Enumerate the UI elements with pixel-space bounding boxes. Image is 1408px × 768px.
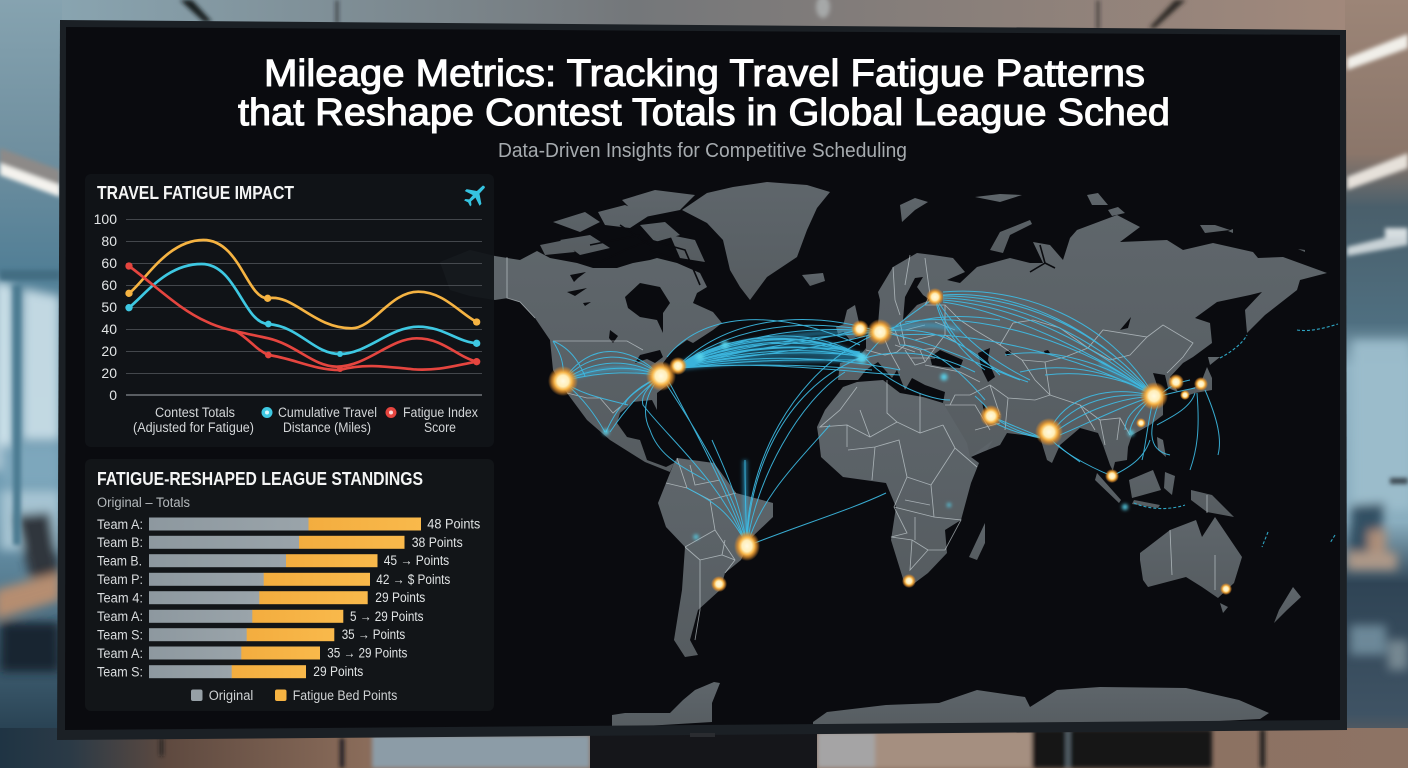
bar value labels: 35 → Points <box>342 627 405 642</box>
bar value labels: 35 → 29 Points <box>327 646 408 660</box>
panel background <box>85 459 494 711</box>
routes: transatlantic <box>667 320 900 375</box>
y-axis labels: 100 <box>94 211 117 227</box>
line chart series <box>125 240 480 372</box>
bar value labels: 5 → 29 Points <box>350 609 424 624</box>
monitor stand <box>590 728 817 768</box>
bar legend: Fatigue Bed Points <box>293 688 398 703</box>
chart legend: Distance (Miles) <box>283 420 371 435</box>
bar legend: Original <box>209 688 253 703</box>
UK and Ireland <box>836 305 860 340</box>
inland seas <box>567 272 1131 418</box>
Madagascar <box>969 523 985 560</box>
routes: USA west to east <box>553 341 705 480</box>
Greenland <box>682 182 830 300</box>
cyan nodes <box>603 341 1134 540</box>
route glow <box>563 325 1154 546</box>
title: Mileage Metrics: Tracking Travel Fatigue Patterns <box>264 53 1145 95</box>
Arctic Russia islands <box>900 193 1305 253</box>
bar legend <box>191 688 398 703</box>
team labels: Team S: <box>97 628 143 642</box>
series: cyan <box>129 264 477 354</box>
chart legend: Score <box>424 420 456 435</box>
bar value labels <box>313 516 481 679</box>
team labels: Team B. <box>97 554 142 568</box>
y-axis labels: 60 <box>101 255 117 271</box>
arctic channels <box>560 225 1055 285</box>
chart legend: Cumulative Travel <box>278 405 377 420</box>
North America <box>494 251 722 472</box>
y-axis labels <box>94 211 117 403</box>
panel subheading: Original – Totals <box>97 495 190 510</box>
South America <box>658 458 773 657</box>
y-axis labels: 80 <box>101 233 117 249</box>
Japan <box>1183 357 1220 397</box>
bar value labels: 45 → Points <box>384 553 449 568</box>
team labels: Team A: <box>97 517 143 532</box>
routes: to Brazil <box>642 332 886 546</box>
Southeast Asia islands <box>1095 437 1234 517</box>
y-axis labels: 50 <box>101 299 117 315</box>
heading block <box>238 53 1170 162</box>
team labels: Team P: <box>97 572 143 587</box>
bars: original points <box>149 518 309 678</box>
chart legend <box>133 405 478 435</box>
chart legend: Fatigue Index <box>403 405 478 420</box>
series: red <box>129 266 477 367</box>
flight routes <box>553 291 1219 546</box>
country borders <box>507 255 1215 640</box>
routes: India and Gulf <box>975 392 1154 462</box>
routes: East Asia and Pacific <box>1052 380 1219 476</box>
glowing city hubs <box>548 288 1232 595</box>
y-axis labels: 0 <box>109 387 117 403</box>
panel: travel fatigue impact <box>85 174 494 447</box>
bars: fatigue adjusted points <box>232 518 421 678</box>
world map <box>440 182 1338 730</box>
series markers <box>125 262 480 372</box>
panel heading: TRAVEL FATIGUE IMPACT <box>97 183 294 203</box>
Arctic islands <box>540 190 705 262</box>
title <box>238 53 1170 134</box>
team labels: Team 4: <box>97 590 143 606</box>
bar value labels: 48 Points <box>427 516 481 532</box>
team labels <box>97 517 143 680</box>
chart legend: Contest Totals <box>155 405 235 420</box>
subtitle: Data-Driven Insights for Competitive Scheduling <box>498 140 907 162</box>
cyan Aleutian and island traces <box>1134 324 1338 547</box>
panel background <box>85 174 494 447</box>
team labels: Team A: <box>97 646 143 661</box>
chart legend: (Adjusted for Fatigue) <box>133 420 254 435</box>
bar value labels: 42 → $ Points <box>376 572 451 587</box>
y-axis labels: 20 <box>101 365 117 381</box>
bar value labels: 38 Points <box>412 535 463 550</box>
y-axis labels: 60 <box>101 277 117 293</box>
Eurasia <box>838 215 1327 481</box>
series: red secondary <box>237 332 477 370</box>
Antarctica <box>612 682 1269 730</box>
team labels: Team S: <box>97 664 143 680</box>
routes: Europe to Asia <box>865 291 1154 400</box>
title: that Reshape Contest Totals in Global League Sched <box>238 92 1170 134</box>
team labels: Team B: <box>97 535 143 550</box>
team labels: Team A: <box>97 609 143 624</box>
bar value labels: 29 Points <box>375 590 426 605</box>
panel: league standings <box>85 459 494 711</box>
bar value labels: 29 Points <box>313 664 364 679</box>
y-axis labels: 40 <box>101 321 117 337</box>
panel heading: FATIGUE-RESHAPED LEAGUE STANDINGS <box>97 469 423 489</box>
Tasmania and New Zealand <box>1220 587 1301 623</box>
Australia <box>1140 517 1242 598</box>
series: orange <box>129 240 477 328</box>
Africa <box>817 380 993 585</box>
Iceland <box>802 273 825 286</box>
y-axis labels: 20 <box>101 343 117 359</box>
monitor webcam notch <box>690 733 715 737</box>
chart grid <box>126 220 482 395</box>
icon: airplane <box>460 179 492 211</box>
continents <box>440 182 1327 730</box>
